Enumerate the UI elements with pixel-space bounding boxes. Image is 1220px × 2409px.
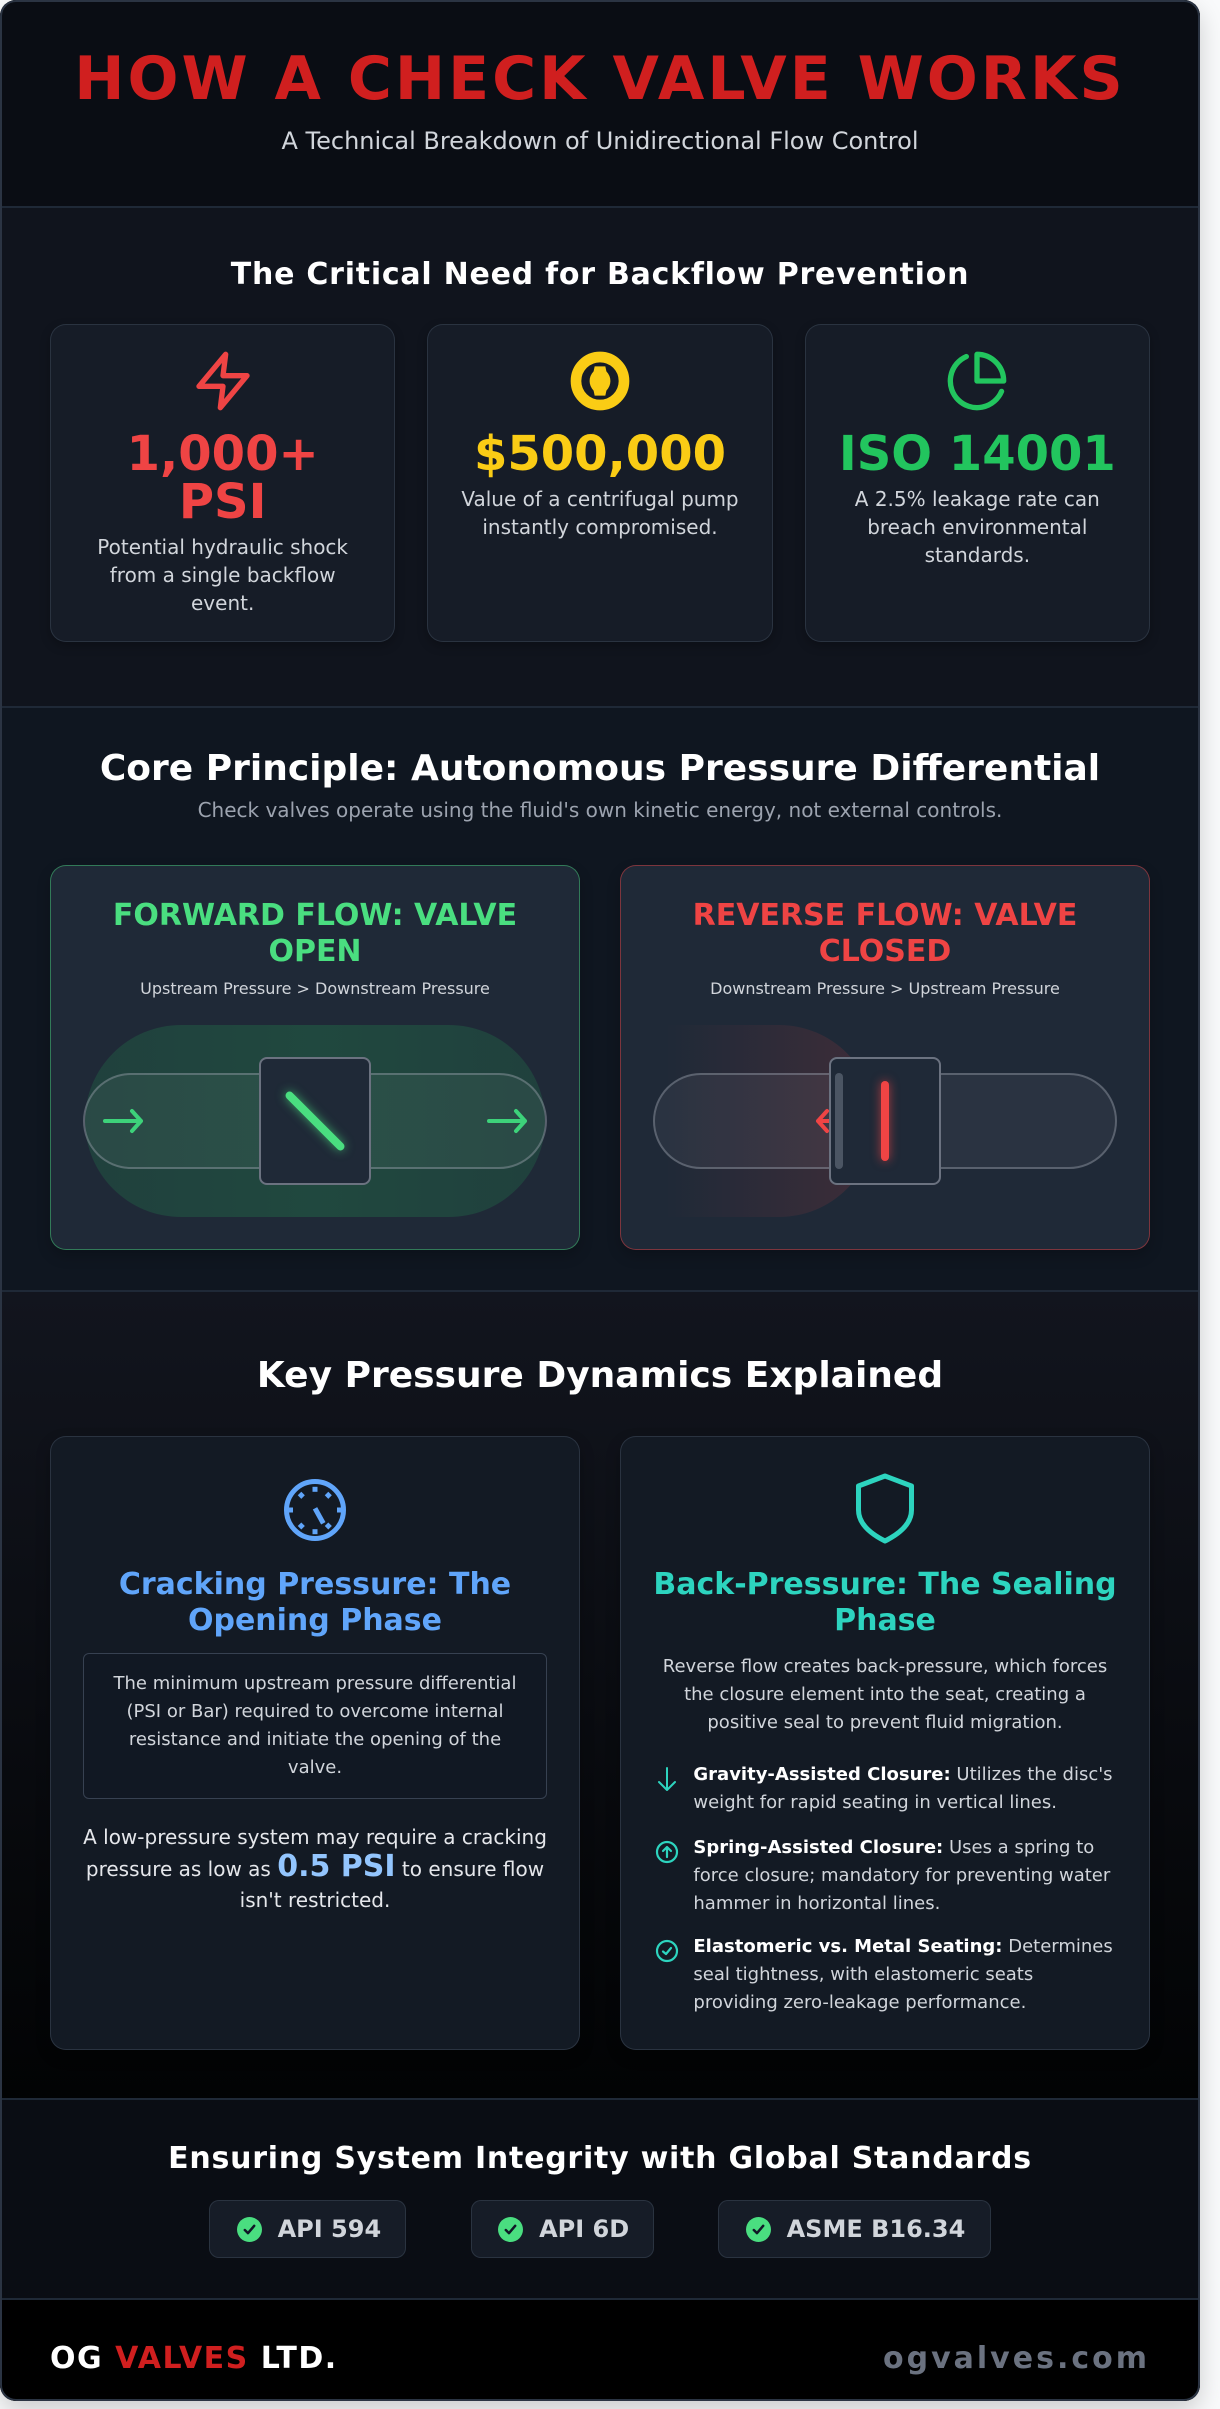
stat card: $500,000 xyxy=(427,324,773,642)
spring-assisted item: hammer in horizontal lines. xyxy=(693,1892,940,1914)
gravity-assisted item: weight for rapid seating in vertical lines. xyxy=(693,1792,1057,1812)
cracking pressure title xyxy=(119,1566,511,1638)
stat value: $500,000 xyxy=(474,426,726,482)
panel: global standards xyxy=(0,2098,1200,2298)
gravity-assisted item xyxy=(693,1764,1113,1812)
icon: lightning bolt xyxy=(196,352,250,410)
elastomeric item: Elastomeric vs. Metal Seating: Determines xyxy=(693,1936,1113,1957)
brand name: OG VALVES LTD. xyxy=(50,2340,338,2376)
heading: pressure dynamics: Key Pressure Dynamics Explained xyxy=(257,1355,943,1396)
stat description: A 2.5% leakage rate can xyxy=(855,487,1100,511)
back-pressure description: Reverse flow creates back-pressure, which forces xyxy=(663,1656,1107,1677)
panel: forward flow xyxy=(50,865,580,1250)
badge: API 594 xyxy=(209,2200,406,2258)
spring-assisted item: Spring-Assisted Closure: Uses a spring to xyxy=(693,1836,1094,1858)
title: HOW A CHECK VALVE WORKS xyxy=(74,44,1126,114)
stat description xyxy=(97,535,348,615)
cracking pressure example: A low-pressure system may require a cracking xyxy=(83,1824,547,1848)
cracking pressure example: isn't restricted. xyxy=(240,1888,390,1912)
back-pressure description: positive seal to prevent fluid migration. xyxy=(707,1712,1063,1733)
definition box xyxy=(83,1653,547,1799)
icon: shield xyxy=(856,1474,914,1544)
valve body open xyxy=(259,1057,371,1185)
spring-assisted item: force closure; mandatory for preventing water xyxy=(693,1864,1110,1886)
icon: coin xyxy=(570,352,630,410)
icon: arrow down xyxy=(658,1767,676,1791)
website: ogvalves.com xyxy=(883,2340,1150,2376)
back-pressure title: Back-Pressure: The Sealing xyxy=(653,1566,1117,1602)
elastomeric item: seal tightness, with elastomeric seats xyxy=(693,1964,1033,1985)
core principle subtitle: Check valves operate using the fluid's own kinetic energy, not external controls. xyxy=(198,798,1002,822)
footer xyxy=(0,2298,1200,2401)
stat value xyxy=(127,426,319,530)
back-pressure description: the closure element into the seat, creating a xyxy=(684,1684,1086,1705)
back-pressure title: Phase xyxy=(834,1603,936,1638)
stat description xyxy=(461,487,739,539)
badge: API 6D: API 6D xyxy=(539,2215,629,2243)
definition text: (PSI or Bar) required to overcome internal xyxy=(126,1701,503,1722)
elastomeric item: providing zero-leakage performance. xyxy=(693,1992,1026,2013)
forward flow title xyxy=(113,898,517,969)
stat description: instantly compromised. xyxy=(482,515,718,539)
icon: arrow up circle xyxy=(656,1840,678,1864)
stat description: breach environmental xyxy=(867,515,1087,539)
valve disc open xyxy=(284,1090,346,1152)
badge: ASME B16.34 xyxy=(718,2200,991,2258)
reverse flow title xyxy=(693,898,1077,969)
icon: check badge xyxy=(746,2217,771,2242)
definition text: The minimum upstream pressure differential xyxy=(114,1673,516,1694)
spring-assisted item xyxy=(693,1836,1110,1914)
card: back-pressure xyxy=(620,1436,1150,2050)
reverse flow condition: Downstream Pressure > Upstream Pressure xyxy=(710,979,1060,998)
definition text: valve. xyxy=(288,1757,342,1778)
valve seat xyxy=(835,1073,843,1169)
valve disc closed xyxy=(881,1081,889,1161)
badge: API 6D xyxy=(470,2200,654,2258)
heading: core principle: Core Principle: Autonomous Pressure Differential xyxy=(100,748,1100,788)
panel: core principle xyxy=(0,706,1200,1290)
pipe xyxy=(653,1073,1117,1169)
stat description: event. xyxy=(191,591,254,615)
cracking pressure title: Cracking Pressure: The xyxy=(119,1566,511,1602)
icon: left flow arrow xyxy=(103,1108,143,1134)
stat value: PSI xyxy=(179,474,266,530)
back-pressure description xyxy=(663,1656,1107,1733)
badge: ASME B16.34: ASME B16.34 xyxy=(787,2215,965,2243)
badge: API 594: API 594 xyxy=(278,2215,381,2243)
card: cracking pressure xyxy=(50,1436,580,2050)
reverse flow title: REVERSE FLOW: VALVE xyxy=(693,898,1077,932)
reverse flow title: CLOSED xyxy=(819,934,951,969)
elastomeric item xyxy=(693,1936,1113,2013)
stat card: 1,000+ PSI xyxy=(50,324,395,642)
cracking pressure title: Opening Phase xyxy=(188,1603,442,1638)
heading: global standards: Ensuring System Integrity with Global Standards xyxy=(168,2140,1032,2176)
forward flow condition: Upstream Pressure > Downstream Pressure xyxy=(140,979,490,998)
stat description: Value of a centrifugal pump xyxy=(461,487,739,511)
forward flow glow xyxy=(85,1025,545,1217)
heading: backflow prevention: The Critical Need for Backflow Prevention xyxy=(231,256,969,292)
panel: backflow prevention xyxy=(0,206,1200,706)
gravity-assisted item: Gravity-Assisted Closure: Utilizes the disc's xyxy=(693,1764,1113,1784)
panel: reverse flow xyxy=(620,865,1150,1250)
reverse flow glow xyxy=(665,1025,875,1217)
stat value: 1,000+ xyxy=(127,426,319,482)
forward flow title: OPEN xyxy=(268,934,362,969)
stat description xyxy=(855,487,1100,567)
definition text: resistance and initiate the opening of the xyxy=(129,1729,501,1750)
icon: check badge xyxy=(237,2217,262,2242)
stat value: ISO 14001 xyxy=(839,426,1116,482)
icon: gauge xyxy=(284,1479,346,1541)
stat description: standards. xyxy=(925,543,1030,567)
icon: reverse flow arrow xyxy=(816,1108,829,1134)
back-pressure title xyxy=(653,1566,1117,1638)
cracking pressure example: pressure as low as 0.5 PSI to ensure flow xyxy=(86,1849,544,1884)
valve body closed xyxy=(829,1057,941,1185)
forward flow title: FORWARD FLOW: VALVE xyxy=(113,898,517,932)
icon: right flow arrow xyxy=(487,1108,527,1134)
icon: check circle xyxy=(656,1940,678,1962)
subtitle: A Technical Breakdown of Unidirectional Flow Control xyxy=(282,127,918,155)
icon: pie chart xyxy=(948,352,1006,410)
cracking pressure example xyxy=(83,1824,547,1912)
panel: pressure dynamics xyxy=(0,1290,1200,2098)
stat card: ISO 14001 xyxy=(805,324,1150,642)
pipe xyxy=(83,1073,547,1169)
definition text xyxy=(113,1673,516,1778)
stat description: Potential hydraulic shock xyxy=(97,535,348,559)
icon: check badge xyxy=(498,2217,523,2242)
header xyxy=(0,0,1200,206)
stat description: from a single backflow xyxy=(110,563,336,587)
